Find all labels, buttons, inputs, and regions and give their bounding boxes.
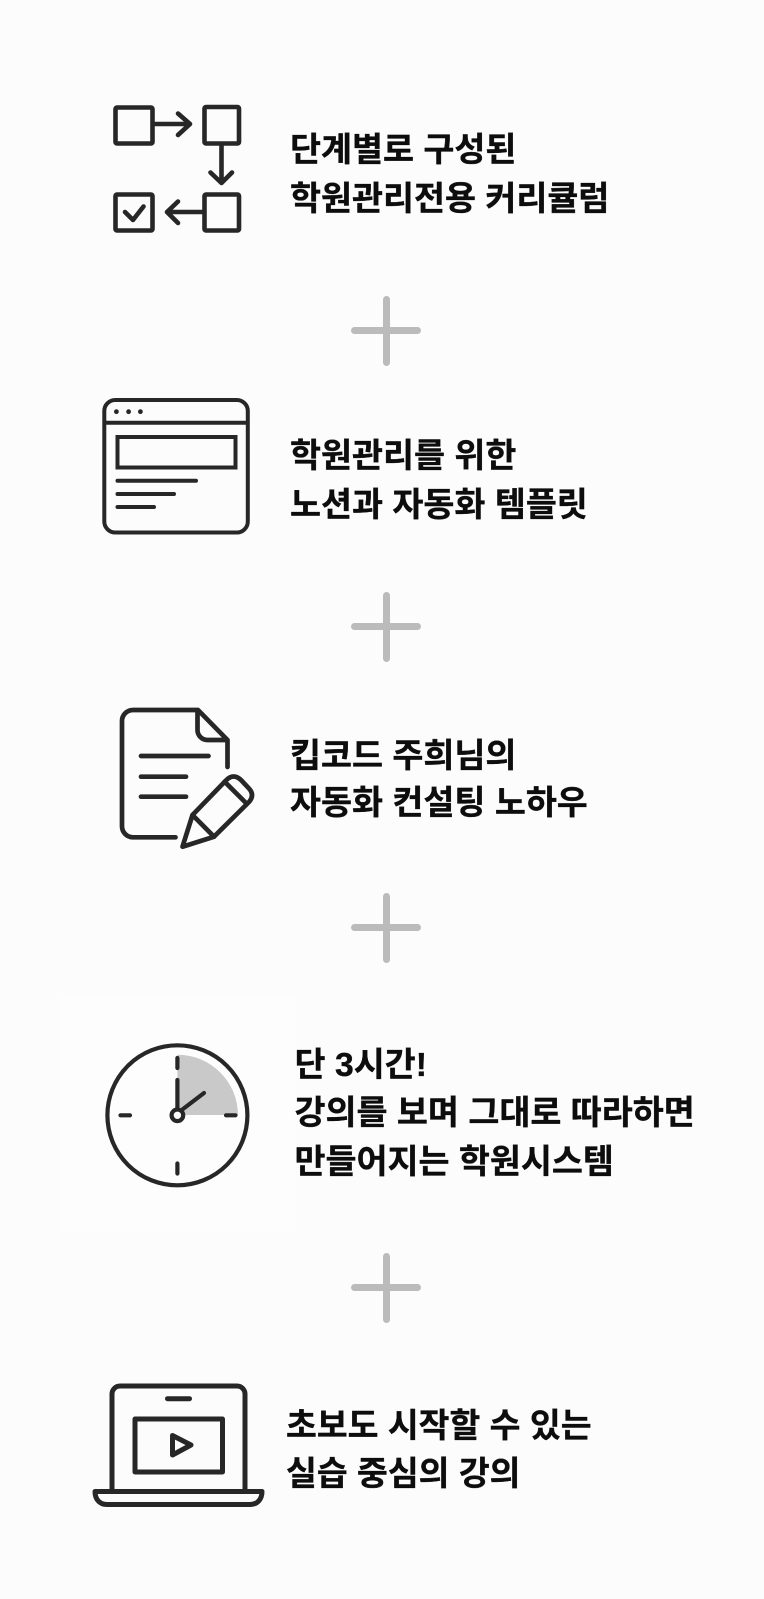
panel: step 5 practice <box>92 1384 592 1507</box>
plus 4 <box>351 1253 421 1323</box>
plus 1 <box>351 296 421 366</box>
panel: step 1 curriculum <box>113 104 609 233</box>
icon: browser window <box>102 398 250 534</box>
text: step 4: 단 3시간! <box>294 1036 427 1086</box>
text: step 1: 단계별로 구성된 <box>290 122 516 170</box>
icon: laptop with video <box>92 1384 264 1507</box>
icon: flow steps <box>113 104 242 233</box>
text: step 2: 노션과 자동화 템플릿 <box>290 476 588 526</box>
icon: document and pencil <box>120 708 254 849</box>
panel: step 3 consulting <box>120 708 588 849</box>
text: step 1: 학원관리전용 커리큘럼 <box>290 170 609 220</box>
text: step 5: 초보도 시작할 수 있는 <box>286 1398 592 1447</box>
text: step 4: 강의를 보며 그대로 따라하면 <box>294 1085 695 1134</box>
panel: step 2 template <box>102 398 588 534</box>
panel: step 4 three hours <box>105 1036 695 1188</box>
text: step 1 <box>290 122 609 220</box>
plus 2 <box>351 592 421 662</box>
text: step 3 <box>290 728 588 824</box>
text: step 4: 만들어지는 학원시스템 <box>294 1134 614 1182</box>
text: step 5 <box>286 1398 592 1495</box>
text: step 2: 학원관리를 위한 <box>290 428 516 476</box>
text: step 3: 자동화 컨설팅 노하우 <box>290 774 588 824</box>
text: step 4 <box>294 1036 695 1182</box>
text: step 2 <box>290 428 588 526</box>
text: step 5: 실습 중심의 강의 <box>286 1446 520 1495</box>
icon: clock <box>105 1043 250 1188</box>
plus 3 <box>351 893 421 963</box>
text: step 3: 킵코드 주희님의 <box>290 728 516 776</box>
